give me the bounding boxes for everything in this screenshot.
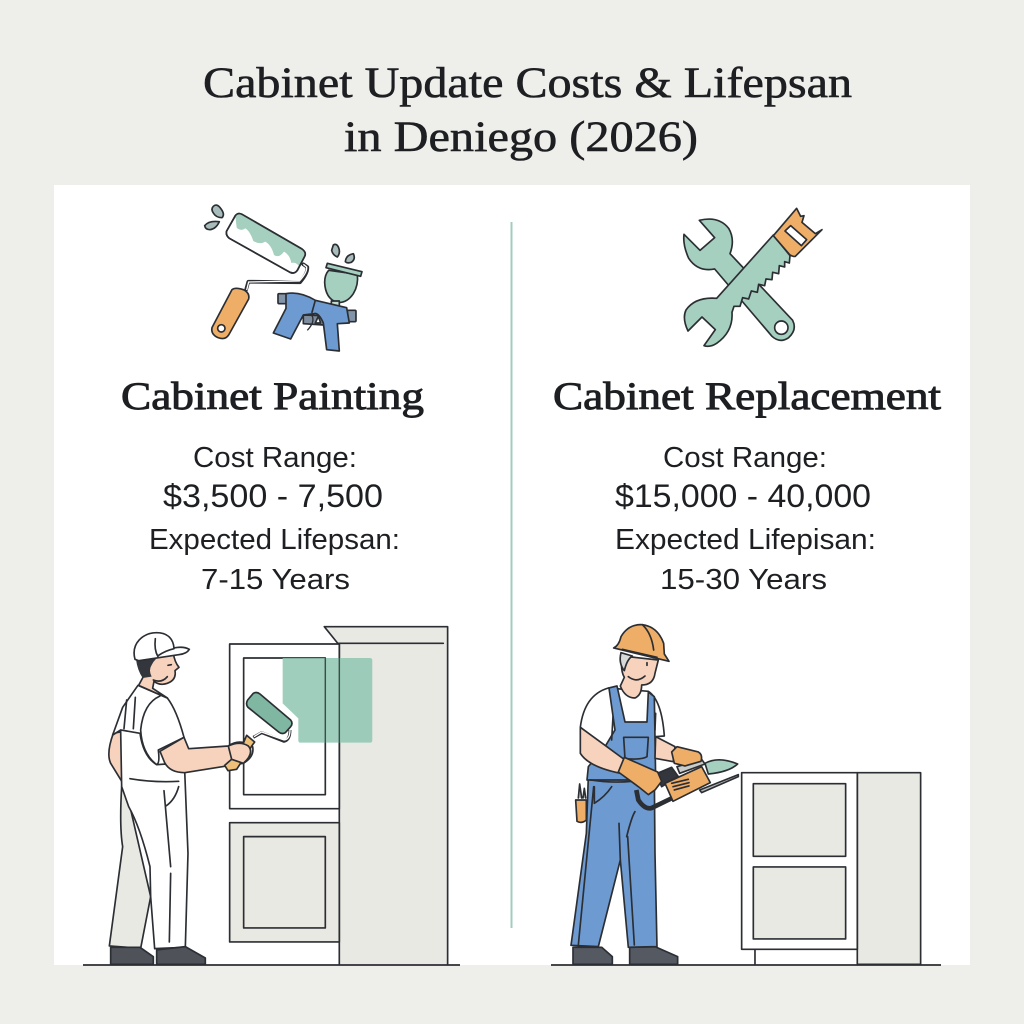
panel: comparison card xyxy=(54,185,970,965)
base cabinet xyxy=(742,773,921,964)
floor lines xyxy=(83,964,941,966)
text block: replacement details: 15-30 Years xyxy=(660,564,827,596)
text block: painting details: Expected Lifepsan: xyxy=(149,524,400,556)
cabinet side and top xyxy=(324,627,448,964)
icon: paint roller and spray gun xyxy=(205,205,362,351)
text block: replacement details xyxy=(615,442,876,596)
title: in Deniego (2026) xyxy=(344,114,698,161)
icon: crossed wrench and saw xyxy=(684,208,822,346)
text block: painting details: $3,500 - 7,500 xyxy=(163,478,383,514)
title xyxy=(203,60,852,161)
illustration: painter at cabinet xyxy=(109,627,448,964)
text block: replacement details: Cost Range: xyxy=(663,442,827,474)
lower cabinet door xyxy=(230,823,339,942)
heading: cabinet replacement: Cabinet Replacement xyxy=(553,375,941,418)
title: Cabinet Update Costs & Lifepsan xyxy=(203,60,852,107)
paint roller in hand xyxy=(247,692,292,741)
power saw xyxy=(618,747,738,808)
worker figure xyxy=(571,625,678,964)
heading: cabinet painting: Cabinet Painting xyxy=(121,375,424,418)
text block: painting details xyxy=(149,442,400,596)
painted swatch xyxy=(283,658,372,743)
text block: replacement details: $15,000 - 40,000 xyxy=(615,478,871,514)
text block: painting details: Cost Range: xyxy=(193,442,357,474)
illustration: worker cutting cabinet xyxy=(571,625,921,964)
text block: replacement details: Expected Lifepisan: xyxy=(615,524,876,556)
text block: painting details: 7-15 Years xyxy=(201,564,350,596)
painter figure xyxy=(109,633,255,964)
upper cabinet door xyxy=(230,644,339,809)
center divider xyxy=(510,222,512,928)
